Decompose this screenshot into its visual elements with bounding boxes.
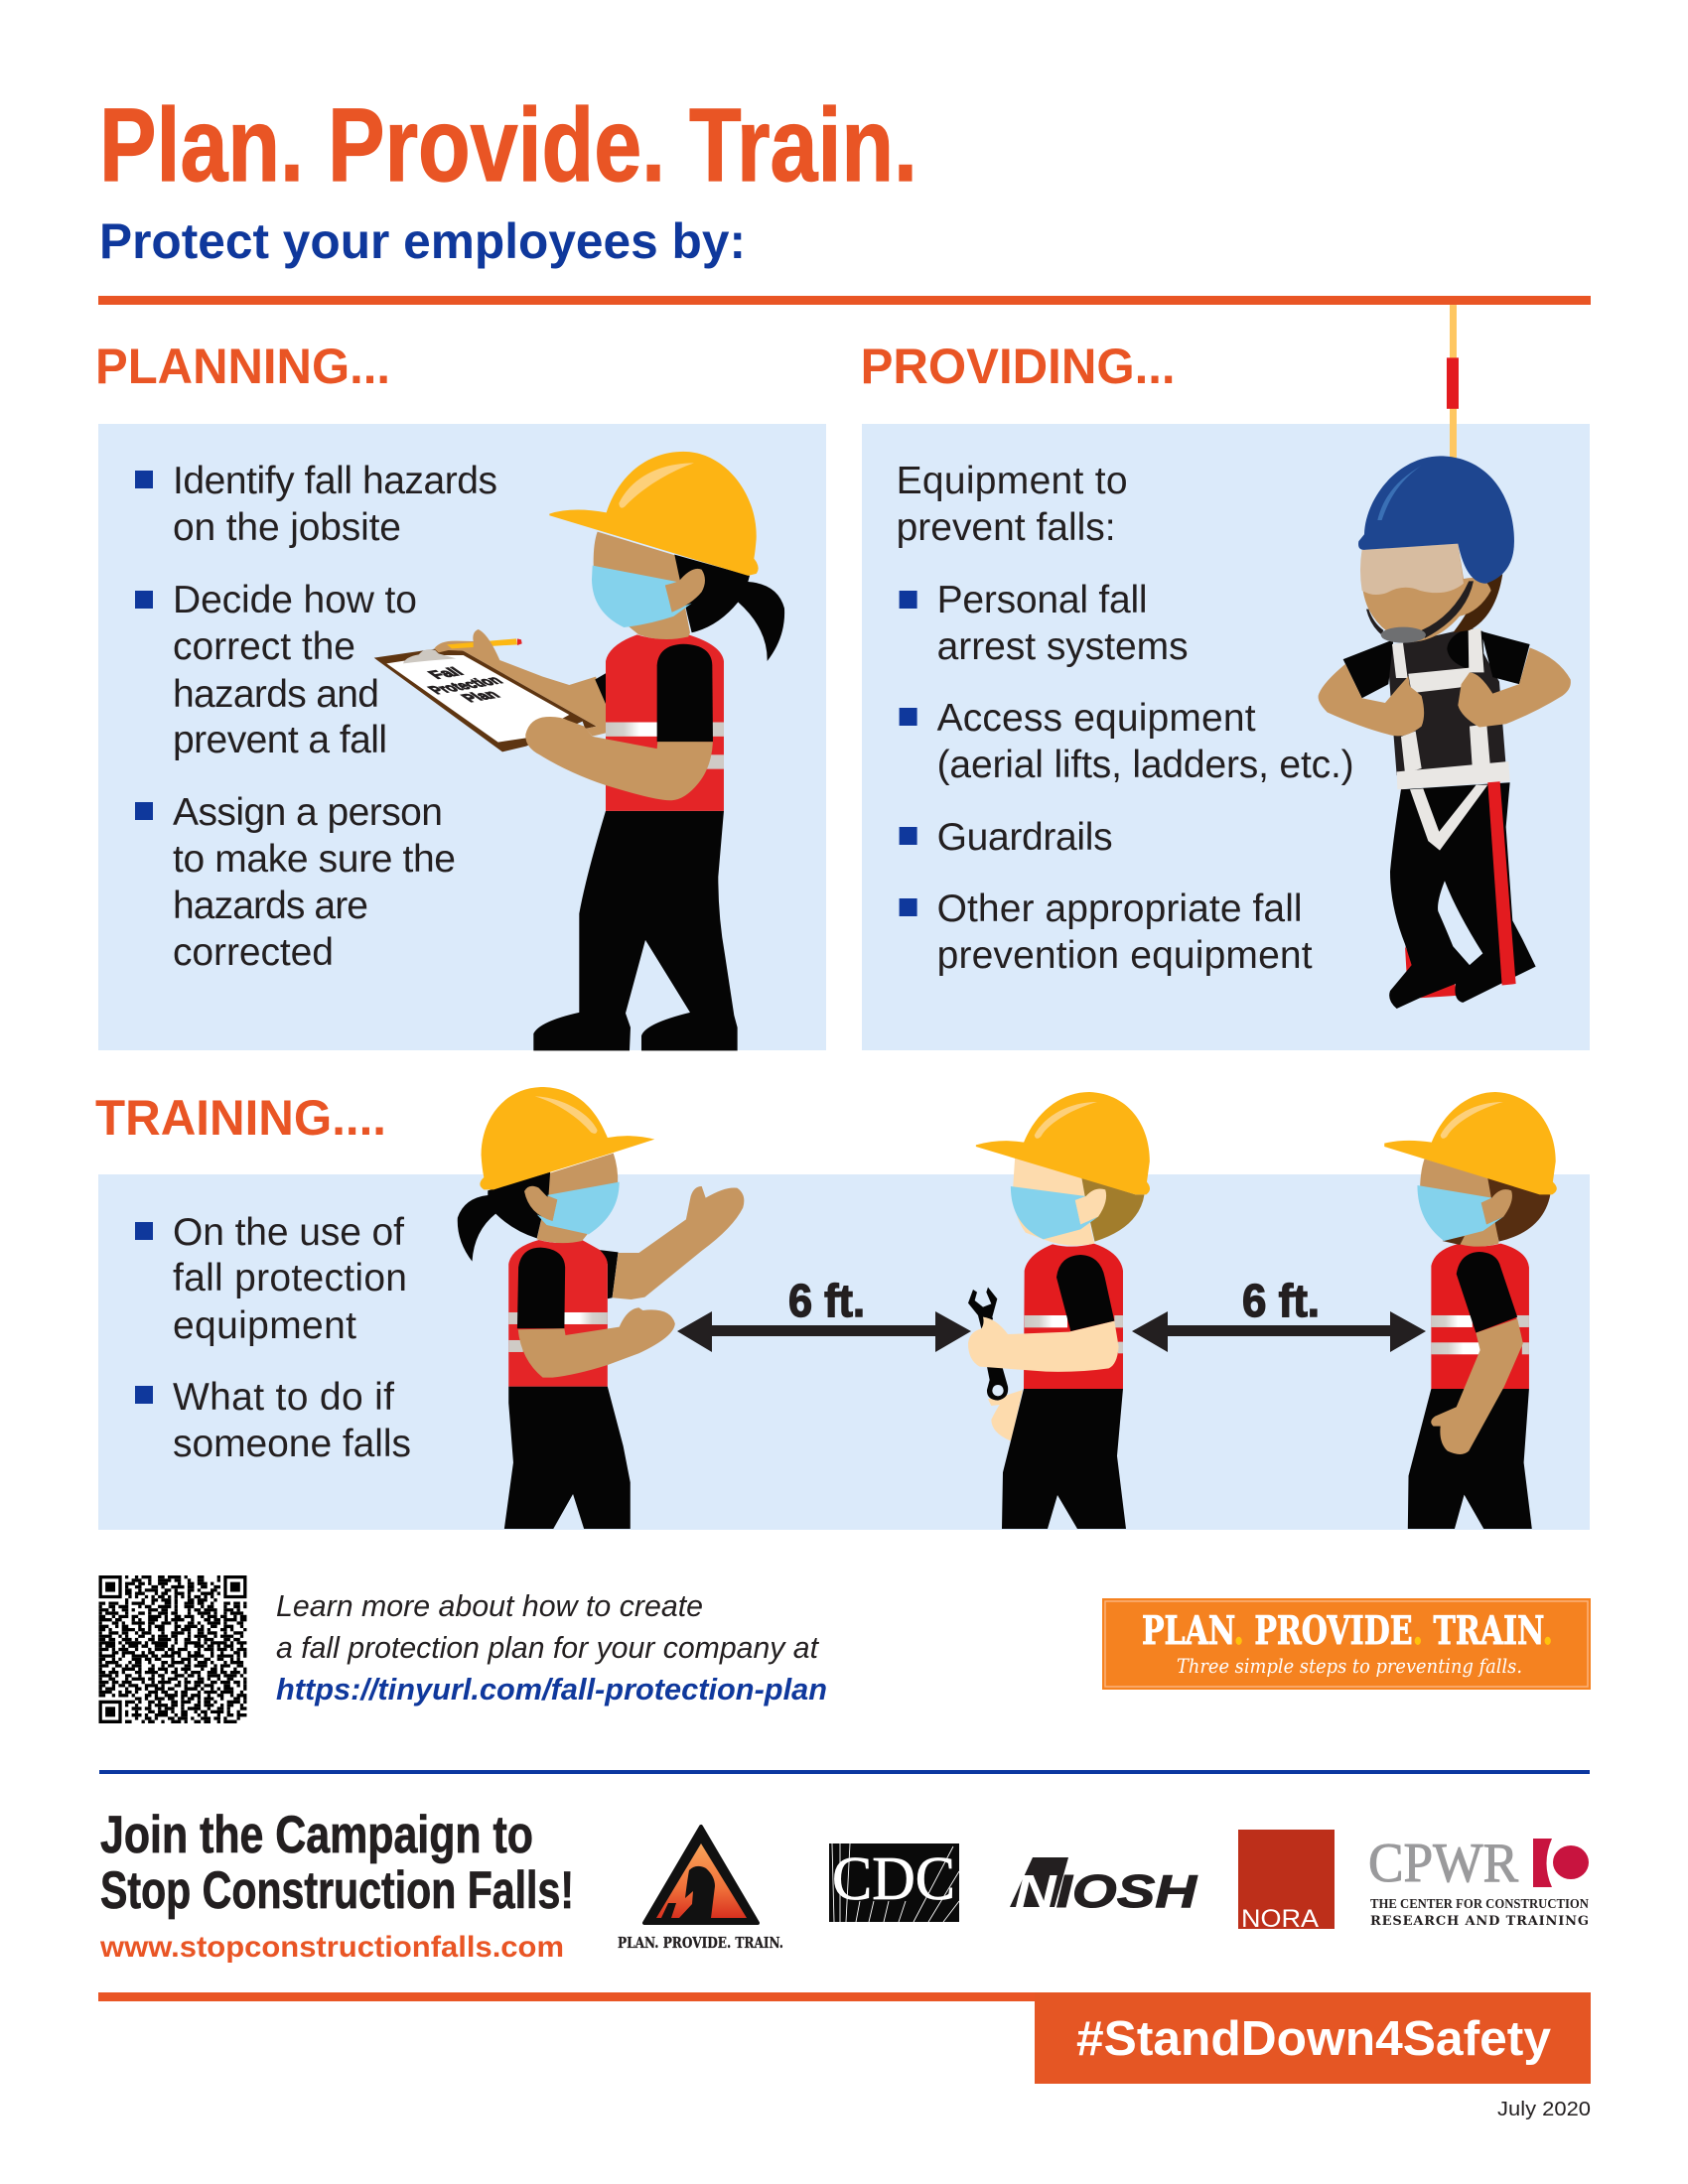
red lanyard behind	[1400, 789, 1457, 998]
planning bullets	[135, 471, 153, 820]
planning list text: Decide how to	[173, 579, 417, 621]
training list text: someone falls	[173, 1423, 411, 1465]
clipboard: Fall	[423, 664, 468, 681]
logo: NIOSH: NIOSH	[1015, 1865, 1197, 1917]
logo: plan provide train triangle: PLAN. PROVIDE. TRAIN.	[618, 1934, 783, 1952]
logo: plan provide train triangle	[618, 1827, 783, 1952]
lifeline	[1450, 305, 1457, 460]
legs	[1389, 782, 1536, 1009]
bottom orange rule	[98, 1992, 1036, 2001]
legs	[533, 811, 738, 1050]
harness straps	[1392, 628, 1510, 851]
logo: CDC: CDC	[832, 1845, 955, 1913]
title: Plan. Provide. Train.	[99, 87, 917, 204]
learn more text	[276, 1588, 827, 1706]
planning list text: hazards are	[173, 885, 368, 927]
panel: providing	[862, 424, 1590, 1050]
planning list text: correct the	[173, 625, 355, 668]
training bullets	[135, 1222, 153, 1404]
arms	[1319, 664, 1424, 736]
providing list text: Personal fall	[937, 579, 1148, 621]
campaign heading: Stop Construction Falls!	[100, 1861, 574, 1920]
hashtag banner: #StandDown4Safety	[1076, 2012, 1551, 2066]
planning list text: Identify fall hazards	[173, 460, 497, 502]
chin strap back	[1366, 610, 1383, 635]
planning list text: Assign a person	[173, 791, 443, 834]
figure: worker in harness with lifeline	[1319, 305, 1571, 1009]
label: 6 ft left: 6 ft.	[788, 1275, 865, 1326]
QR code	[99, 1575, 246, 1723]
subtitle: Protect your employees by:	[99, 213, 746, 269]
hair	[1453, 574, 1502, 632]
vest	[606, 634, 724, 811]
campaign heading	[100, 1806, 574, 1920]
providing intro text: Equipment to	[897, 460, 1128, 502]
panel: planning	[98, 424, 826, 1050]
logo: NORA: NORA	[1241, 1905, 1319, 1933]
panel: training	[98, 1174, 1590, 1530]
head	[594, 532, 690, 639]
clipboard	[374, 629, 606, 751]
label: 6 ft right: 6 ft.	[1242, 1275, 1320, 1326]
back sleeve	[595, 673, 606, 704]
providing list text: arrest systems	[937, 625, 1189, 668]
planning list text: on the jobsite	[173, 506, 401, 549]
clipboard: Plan	[456, 687, 504, 705]
logo: NORA	[1238, 1830, 1335, 1933]
campaign url: www.stopconstructionfalls.com	[99, 1931, 564, 1964]
planning list text	[173, 460, 497, 974]
providing intro text: prevent falls:	[897, 506, 1116, 549]
badge: plan provide train: PLAN. PROVIDE. TRAIN.	[1142, 1608, 1553, 1654]
figure: worker holding wrench	[968, 1092, 1150, 1529]
logo: CPWR: RESEARCH AND TRAINING	[1370, 1914, 1589, 1929]
hashtag banner	[1035, 1992, 1591, 2084]
planning list text: corrected	[173, 931, 334, 974]
ear	[665, 569, 705, 613]
front arm	[525, 717, 713, 800]
hard hat	[549, 452, 759, 576]
chin strap	[1422, 581, 1474, 638]
training list text: What to do if	[173, 1376, 394, 1419]
providing list text	[937, 579, 1354, 977]
mask	[592, 566, 692, 627]
figure: trainer gesturing	[458, 1087, 744, 1529]
learn more text: a fall protection plan for your company at	[276, 1630, 819, 1665]
face	[1361, 544, 1491, 642]
sleeve	[657, 644, 713, 742]
campaign heading: Join the Campaign to	[100, 1806, 533, 1864]
logo: CPWR: THE CENTER FOR CONSTRUCTION	[1370, 1897, 1589, 1912]
providing intro text	[897, 460, 1128, 549]
logo: CPWR: CPWR	[1368, 1833, 1519, 1894]
planning list text: hazards and	[173, 673, 379, 716]
top orange rule	[98, 296, 1591, 305]
providing list text: Access equipment	[937, 697, 1256, 740]
providing list text: prevention equipment	[937, 934, 1313, 977]
providing list text: Other appropriate fall	[937, 887, 1303, 930]
planning list text: to make sure the	[173, 838, 456, 881]
blue rule	[99, 1770, 1590, 1774]
training list text: fall protection	[173, 1257, 407, 1299]
training list text	[173, 1211, 411, 1465]
figure: worker listening	[1384, 1092, 1557, 1529]
arrow: 6 ft right	[1132, 1311, 1426, 1352]
learn more text: https://tinyurl.com/fall-protection-plan	[276, 1672, 827, 1706]
heading: training: TRAINING....	[95, 1090, 386, 1146]
training list text: On the use of	[173, 1211, 404, 1254]
clipboard: Protection	[423, 673, 507, 697]
logo: CPWR	[1368, 1833, 1589, 1929]
goggles	[1360, 544, 1464, 595]
figure: worker with clipboard	[374, 452, 784, 1050]
arrow: 6 ft left	[677, 1311, 971, 1352]
badge: plan provide train	[1102, 1598, 1591, 1690]
heading: providing: PROVIDING...	[861, 339, 1176, 394]
providing list text: (aerial lifts, ladders, etc.)	[937, 744, 1354, 786]
wrench	[968, 1288, 997, 1328]
training list text: equipment	[173, 1304, 356, 1347]
torso	[1387, 628, 1506, 775]
red strap	[1487, 781, 1516, 985]
far hand	[988, 1390, 1023, 1441]
date: July 2020	[1497, 2098, 1591, 2120]
learn more text: Learn more about how to create	[276, 1588, 703, 1623]
helmet	[1358, 456, 1514, 584]
heading: planning: PLANNING...	[95, 339, 390, 394]
providing bullets	[900, 591, 917, 916]
hair	[674, 555, 784, 661]
providing list text: Guardrails	[937, 816, 1113, 859]
planning list text: prevent a fall	[173, 719, 387, 761]
badge: plan provide train: Three simple steps to preventing falls.	[1177, 1654, 1522, 1678]
